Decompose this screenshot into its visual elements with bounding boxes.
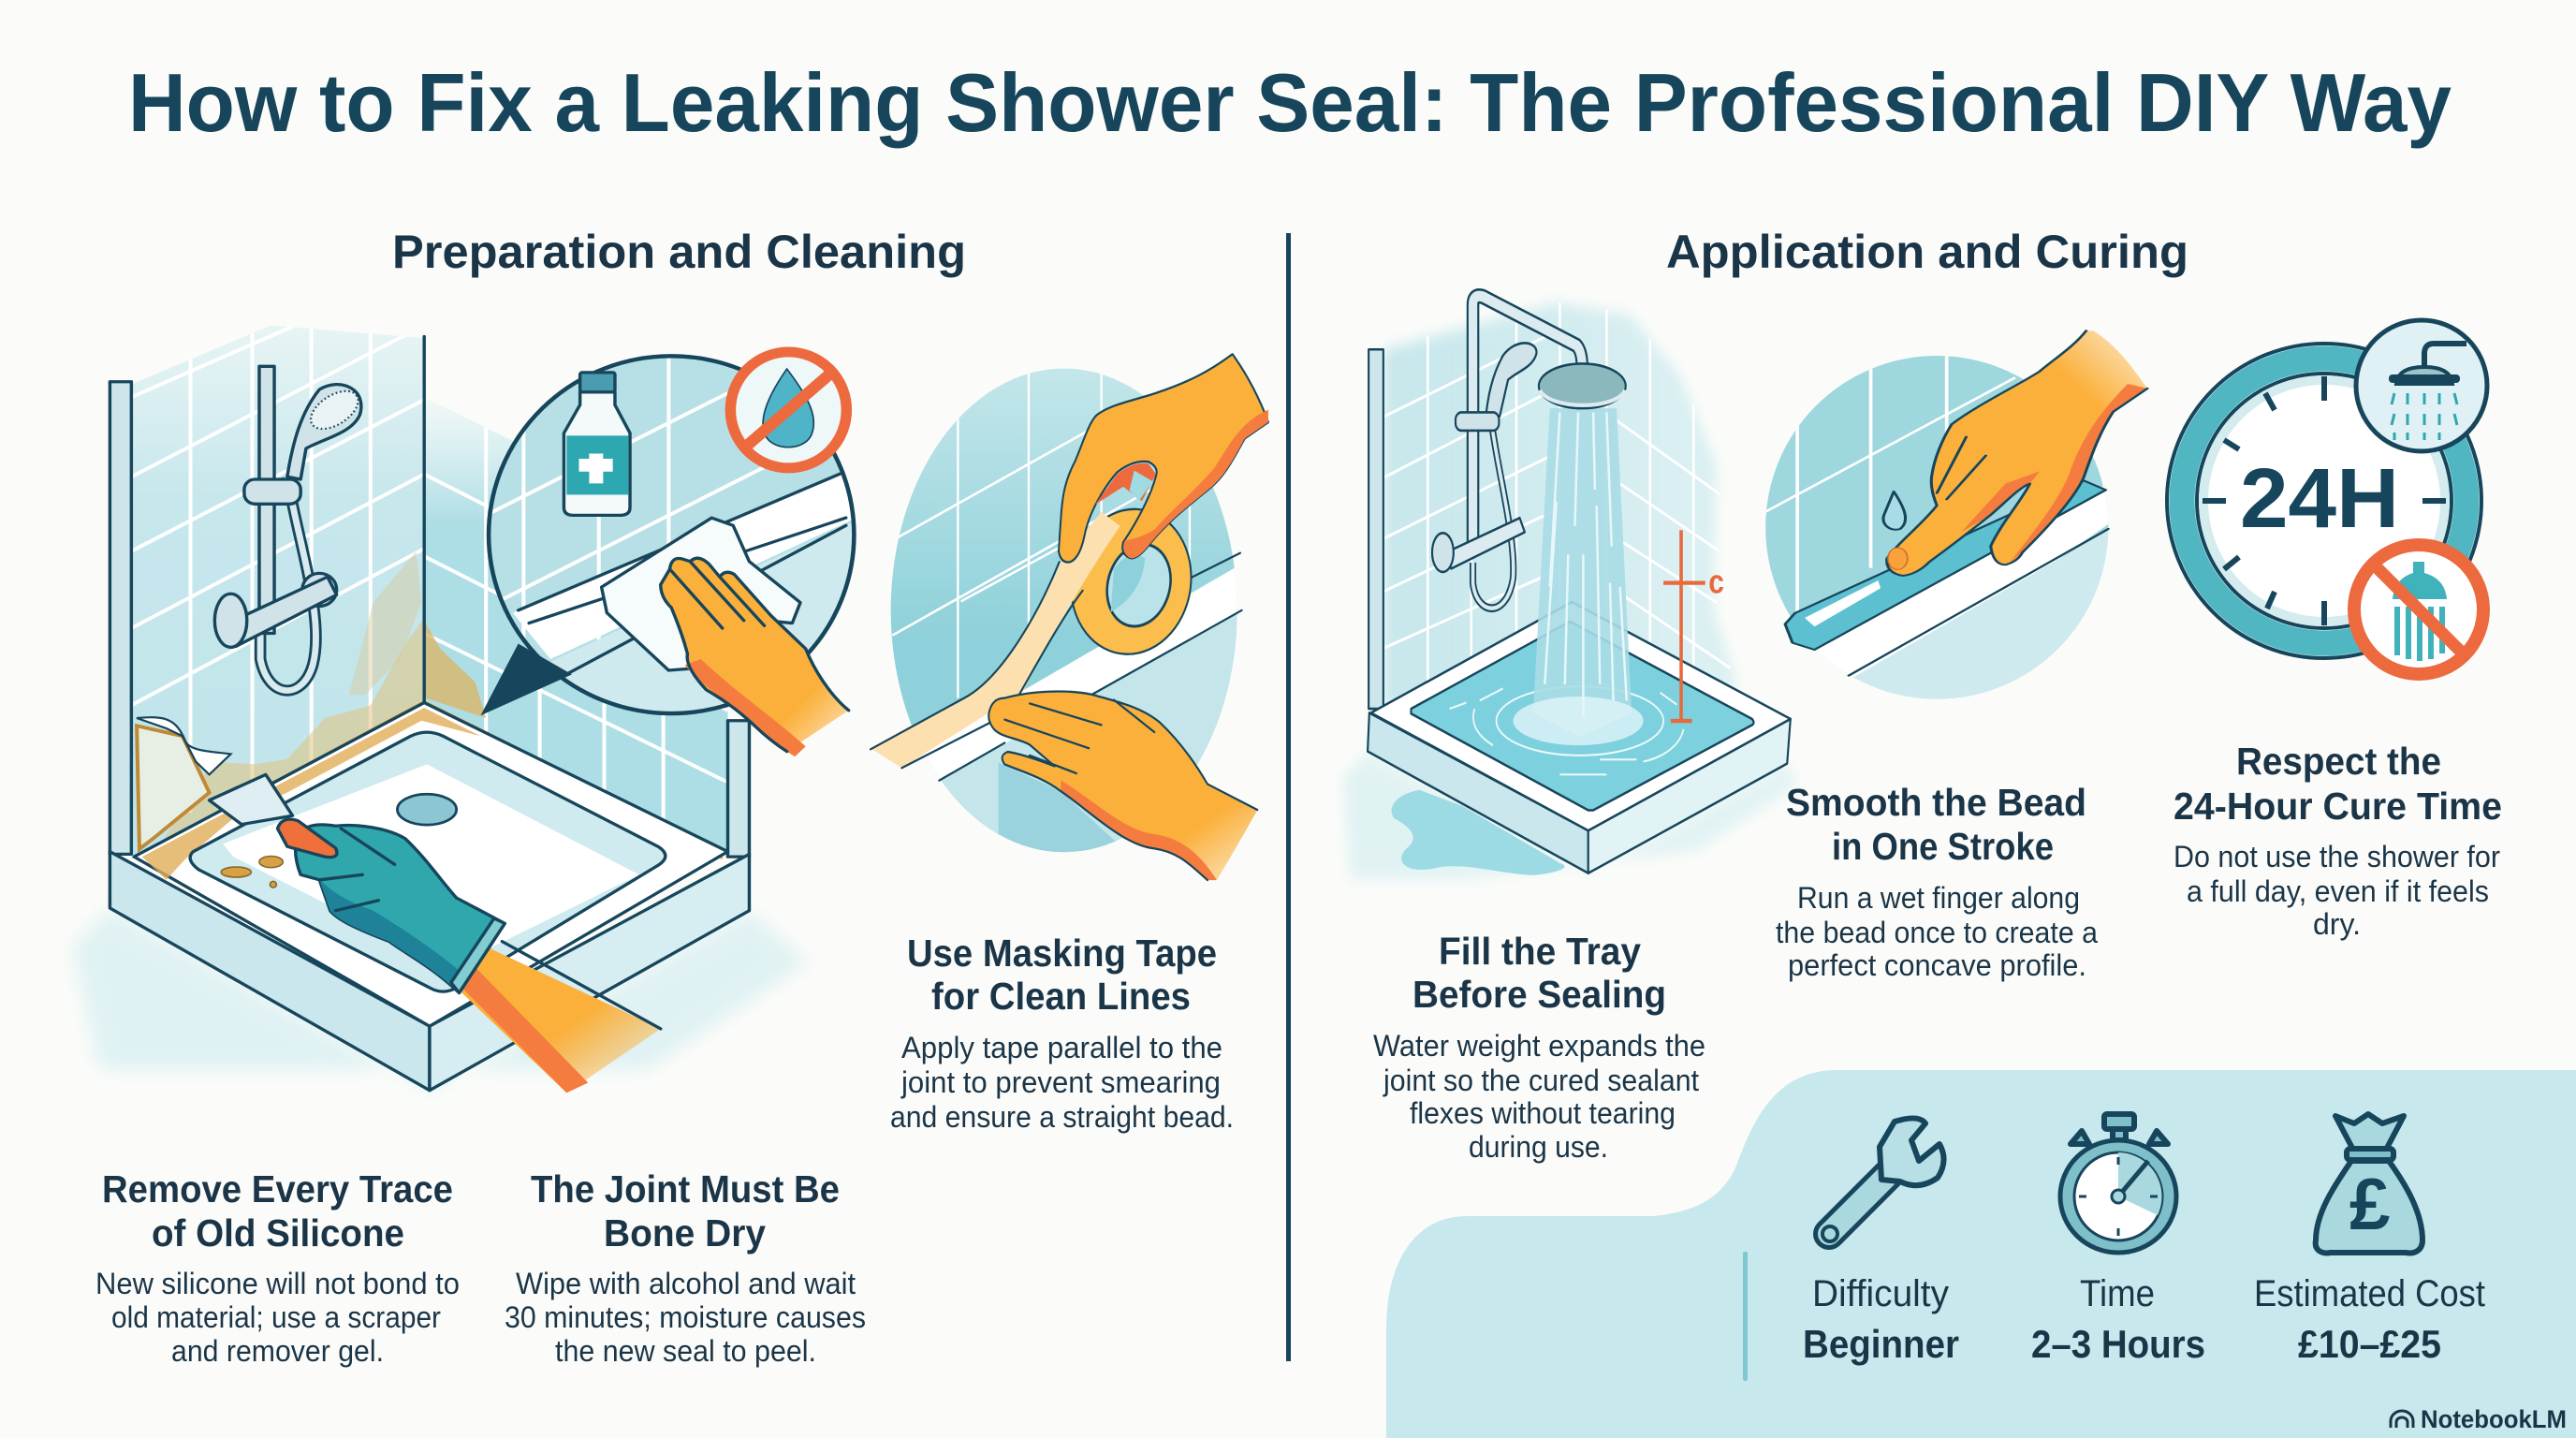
step heading: Respect the xyxy=(2236,740,2441,783)
ledge line xyxy=(1849,529,2108,676)
riser and arm xyxy=(1432,296,1626,609)
step heading: of Old Silicone xyxy=(152,1211,404,1255)
falling water stream xyxy=(1533,408,1632,737)
step body: and ensure a straight bead. xyxy=(890,1100,1234,1134)
right wall tiles xyxy=(425,399,728,849)
right side stain xyxy=(424,621,486,718)
tray top xyxy=(134,703,728,1026)
central divider xyxy=(1286,233,1291,1361)
pipe outline xyxy=(1473,296,1582,547)
tray left face xyxy=(1368,712,1588,873)
case xyxy=(2060,1140,2176,1253)
heading: preparation and cleaning: Preparation and Cleaning xyxy=(392,226,966,278)
magnifier pointer xyxy=(480,643,572,715)
step text: remove old silicone xyxy=(95,1167,460,1368)
tape roll xyxy=(1050,486,1212,677)
roll outer xyxy=(1050,486,1212,677)
step body: old material; use a scraper xyxy=(111,1300,441,1334)
step body: Apply tape parallel to the xyxy=(901,1031,1222,1064)
no shower badge xyxy=(2354,545,2483,674)
stat label: Time xyxy=(2080,1273,2155,1314)
NotebookLM logo xyxy=(2391,1405,2567,1433)
teal glove xyxy=(296,825,505,992)
shower icon head xyxy=(2393,562,2447,599)
drain xyxy=(397,794,457,825)
rail xyxy=(259,366,274,634)
spilled puddle xyxy=(1392,790,1564,875)
bag body xyxy=(2316,1161,2422,1253)
overhead shower head xyxy=(1539,363,1626,408)
icon: wrench xyxy=(1822,1118,1944,1241)
gap window xyxy=(1130,471,1153,501)
clock: 24 hour cure xyxy=(2167,320,2487,674)
upper hand shade xyxy=(1124,410,1268,558)
valve knob xyxy=(214,594,247,647)
wiping hand xyxy=(661,558,849,752)
step body: New silicone will not bond to xyxy=(95,1267,460,1300)
tray left face xyxy=(110,852,430,1091)
clock ring colour xyxy=(2182,359,2466,643)
wrench head xyxy=(1880,1118,1944,1185)
floor shadow xyxy=(72,908,809,1091)
shower rail and hand shower xyxy=(214,366,365,691)
arm top outline xyxy=(502,942,661,1029)
fingertip xyxy=(1888,548,1908,569)
scraper blade xyxy=(210,774,293,825)
badge fill xyxy=(2357,548,2481,671)
roll hole xyxy=(1095,532,1182,638)
pound sign: £ xyxy=(2349,1163,2390,1245)
valve knob xyxy=(1432,533,1454,572)
stem xyxy=(2113,1129,2126,1140)
step heading: Fill the Tray xyxy=(1439,930,1641,973)
step body: Do not use the shower for xyxy=(2174,840,2500,873)
illustration: hands applying masking tape xyxy=(871,318,1268,891)
stat label: Difficulty xyxy=(1812,1273,1949,1314)
hose inner xyxy=(260,477,316,691)
panel divider xyxy=(1743,1252,1748,1381)
hose loop xyxy=(1473,420,1514,609)
bottle cap xyxy=(580,373,615,392)
magnifier ring xyxy=(489,356,854,713)
wall corner line xyxy=(421,336,427,705)
stat value: Beginner xyxy=(1803,1322,1959,1366)
step heading: Use Masking Tape xyxy=(907,932,1217,975)
bag tie xyxy=(2347,1149,2393,1160)
magnifier background xyxy=(489,356,854,713)
stat value: 2–3 Hours xyxy=(2031,1322,2205,1366)
floor shadow xyxy=(1342,752,1797,879)
hose inner xyxy=(1473,420,1514,609)
tape ribbon xyxy=(871,512,1120,768)
water in tray xyxy=(1411,622,1754,810)
hand shower head xyxy=(287,385,361,479)
hand shade xyxy=(2011,384,2147,562)
badge pipe xyxy=(2424,344,2466,367)
icon: stopwatch xyxy=(2060,1114,2176,1253)
logo mark xyxy=(2391,1411,2413,1428)
tile grid xyxy=(1384,302,1731,709)
wrench handle xyxy=(1829,1170,1893,1234)
badge drops xyxy=(2392,393,2457,440)
hose xyxy=(260,477,316,691)
right glass frame xyxy=(728,721,749,857)
step body: Water weight expands the xyxy=(1373,1029,1705,1063)
knuckle lines xyxy=(1937,437,1986,499)
hand shade xyxy=(685,659,806,756)
24H label: 24H xyxy=(2240,452,2399,546)
shower icon streams xyxy=(2397,607,2442,661)
alcohol bottle xyxy=(564,373,630,515)
title: How to Fix a Leaking Shower Seal: The Professional DIY Way xyxy=(128,56,2452,149)
prohibit slash xyxy=(2374,565,2464,654)
panel background xyxy=(1386,1070,2576,1438)
step heading: for Clean Lines xyxy=(931,975,1191,1018)
bottle label xyxy=(566,435,628,494)
step body: perfect concave profile. xyxy=(1788,948,2086,982)
upper mould patch xyxy=(349,551,421,695)
sign backing xyxy=(730,352,846,468)
step heading: Before Sealing xyxy=(1412,973,1666,1016)
cleaning cloth xyxy=(602,518,800,670)
hand outline xyxy=(661,558,849,752)
disc details xyxy=(1765,330,2108,705)
pivot xyxy=(2112,1190,2125,1203)
basin floor xyxy=(223,764,639,967)
finger lines xyxy=(1004,700,1154,773)
heading: application and curing: Application and Curing xyxy=(1666,226,2188,278)
clock ticks xyxy=(2203,376,2446,625)
debris flakes xyxy=(221,857,283,888)
icon: money bag xyxy=(2316,1114,2422,1253)
medical cross xyxy=(579,454,613,483)
stat: difficulty xyxy=(1803,1273,1959,1366)
sealant bead xyxy=(1785,480,2106,650)
glove finger lines xyxy=(319,829,395,911)
tile disc xyxy=(891,369,1237,852)
illustration: shower filling tray with water xyxy=(1342,296,1797,879)
prohibit ring xyxy=(730,352,846,468)
scraper handle xyxy=(277,819,337,858)
tile disc xyxy=(1765,356,2108,699)
step text: masking tape xyxy=(890,932,1234,1134)
hand shower xyxy=(1486,343,1536,417)
step heading: The Joint Must Be xyxy=(531,1167,840,1211)
step body: 30 minutes; moisture causes xyxy=(505,1300,866,1334)
left glass frame xyxy=(110,382,131,854)
lower hand shade xyxy=(1061,781,1217,880)
step heading: Bone Dry xyxy=(604,1211,766,1255)
magnifier callout xyxy=(480,325,862,756)
slider xyxy=(244,479,300,504)
tape ribbon edges xyxy=(871,562,1083,768)
needle xyxy=(2118,1161,2148,1196)
badge head base xyxy=(2389,374,2460,383)
basin xyxy=(190,732,666,991)
arm with glove xyxy=(459,944,661,1093)
marker label: c xyxy=(1708,564,1724,601)
badge circle xyxy=(2356,320,2487,451)
badge shower head xyxy=(2396,367,2452,384)
disc details xyxy=(891,373,1237,852)
water streaks xyxy=(1544,412,1627,717)
step heading: Smooth the Bead xyxy=(1786,781,2086,824)
dial xyxy=(2074,1152,2162,1240)
lower hand outline xyxy=(988,691,1257,880)
head rim xyxy=(1540,390,1625,405)
splash foam xyxy=(1513,697,1644,745)
wrench ring xyxy=(1822,1226,1837,1241)
shower badge xyxy=(2356,320,2487,451)
bag top xyxy=(2335,1114,2404,1152)
valve right knob xyxy=(302,573,337,606)
tray top xyxy=(1371,602,1791,830)
peeled silicone strip xyxy=(137,717,231,774)
stat label: Estimated Cost xyxy=(2254,1273,2485,1314)
finger web shade xyxy=(1961,471,2040,532)
no water sign xyxy=(730,352,846,468)
gap between thumb and finger xyxy=(1095,463,1156,505)
side lugs xyxy=(2071,1131,2168,1144)
tray right face xyxy=(430,854,749,1091)
step body: a full day, even if it feels xyxy=(2187,874,2489,908)
crown xyxy=(2104,1114,2134,1129)
illustration: shower tray with old silicone being scraped xyxy=(72,269,862,1093)
stat: estimated cost xyxy=(2254,1273,2485,1366)
step body: Wipe with alcohol and wait xyxy=(516,1267,856,1300)
soft wall wash xyxy=(1384,302,1738,709)
glove cuff xyxy=(451,918,505,992)
wrench handle fill xyxy=(1829,1170,1893,1234)
step body: the new seal to peel. xyxy=(555,1334,816,1368)
illustration: finger smoothing the sealant bead xyxy=(1765,330,2147,705)
stat value: £10–£25 xyxy=(2298,1322,2441,1366)
joint stain on tray xyxy=(142,708,480,880)
finger lines xyxy=(670,562,765,628)
roll hole shade xyxy=(1111,555,1145,612)
stat: time xyxy=(2031,1273,2205,1366)
step body: during use. xyxy=(1469,1130,1608,1164)
step text: respect cure time xyxy=(2174,740,2502,941)
smoothing hand fill xyxy=(1887,330,2147,576)
left wall tiles xyxy=(131,326,423,859)
bottle body xyxy=(564,392,630,515)
exposed tile patch xyxy=(137,726,210,849)
logo text: NotebookLM xyxy=(2421,1405,2567,1433)
stain haze on wall xyxy=(153,618,424,857)
clock face xyxy=(2197,374,2452,628)
step text: joint bone dry xyxy=(505,1167,866,1368)
ripples xyxy=(1450,686,1684,774)
step body: the bead once to create a xyxy=(1776,916,2098,949)
panel: project summary xyxy=(1386,1070,2576,1438)
arm shade xyxy=(461,967,588,1093)
elapsed wedge xyxy=(2118,1152,2161,1215)
shower face xyxy=(304,384,365,436)
glass frame xyxy=(1368,349,1383,709)
step body: Run a wet finger along xyxy=(1797,881,2080,915)
valve bar xyxy=(228,577,337,646)
hour marks xyxy=(2079,1157,2158,1236)
marker stem xyxy=(1663,530,1705,721)
step heading: Remove Every Trace xyxy=(102,1167,453,1211)
orange level marker xyxy=(1663,530,1724,721)
lower hand fill xyxy=(988,691,1257,880)
prohibit ring xyxy=(2354,545,2483,674)
step heading: 24-Hour Cure Time xyxy=(2174,785,2502,828)
step body: flexes without tearing xyxy=(1410,1096,1676,1130)
step text: smooth the bead xyxy=(1776,781,2098,982)
valve bar xyxy=(1446,518,1525,568)
clock pale rim xyxy=(2203,380,2445,622)
tray right face xyxy=(1588,719,1791,873)
step body: joint to prevent smearing xyxy=(900,1065,1221,1099)
water drop xyxy=(763,369,813,448)
mould band along joint xyxy=(137,700,723,864)
pipe inner xyxy=(1473,296,1582,547)
magnifier contents xyxy=(492,358,852,712)
step text: fill the tray xyxy=(1373,930,1705,1164)
step body: dry. xyxy=(2313,907,2361,941)
slider bracket xyxy=(1456,412,1499,431)
hand outline xyxy=(1887,330,2147,576)
glove shade xyxy=(319,880,469,992)
upper hand xyxy=(1059,354,1268,562)
clock ring xyxy=(2167,344,2481,658)
step body: and remover gel. xyxy=(171,1334,384,1368)
water droplet xyxy=(1883,492,1906,530)
ledge lines xyxy=(939,553,1242,781)
step body: joint so the cured sealant xyxy=(1383,1064,1699,1097)
bead highlight xyxy=(1805,580,1881,626)
step heading: in One Stroke xyxy=(1832,825,2054,868)
prohibit slash xyxy=(747,374,830,446)
